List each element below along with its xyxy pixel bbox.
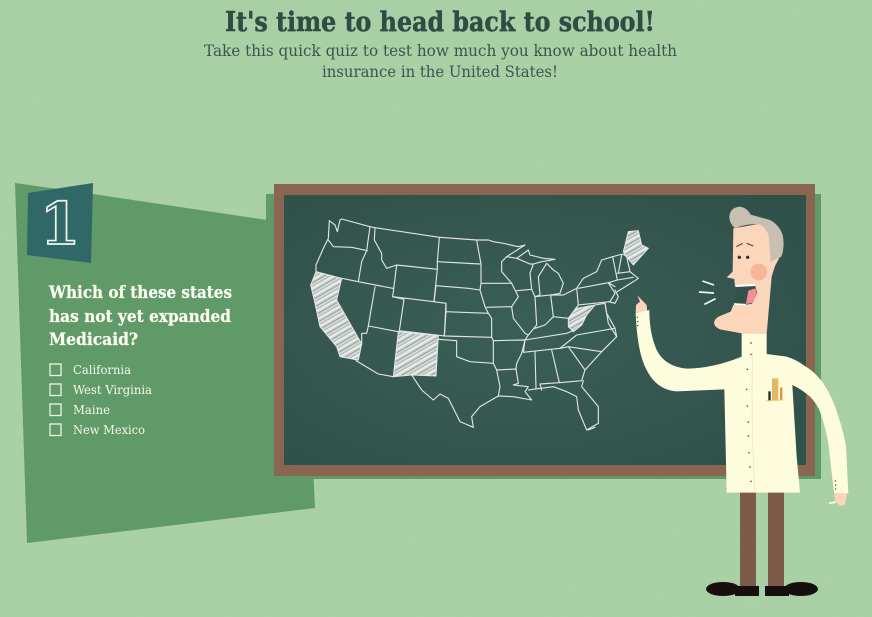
answer options: New Mexico	[73, 423, 145, 437]
answer options	[50, 363, 152, 437]
badge: question number: 1	[40, 190, 80, 258]
raised hand	[636, 295, 647, 313]
panel: question	[15, 183, 315, 543]
coat seam and buttons	[637, 317, 836, 492]
pocket with ruler, pen and pencil	[766, 378, 783, 401]
question text: has not yet expanded	[49, 307, 231, 326]
subtitle	[204, 42, 677, 81]
chalkboard	[266, 184, 821, 479]
shoes	[706, 582, 818, 596]
title: It's time to head back to school!	[225, 7, 655, 38]
state borders	[316, 219, 638, 430]
lower hand	[834, 492, 847, 506]
badge: question number	[27, 183, 93, 263]
map of the United States	[311, 219, 648, 430]
cheek	[750, 264, 767, 280]
answer options: Maine	[73, 403, 110, 417]
Maine	[623, 231, 648, 265]
subtitle: insurance in the United States!	[322, 63, 558, 81]
chalk	[829, 502, 836, 503]
speech lines	[699, 281, 716, 304]
subtitle: Take this quick quiz to test how much you know about health	[204, 42, 677, 60]
California	[311, 272, 362, 360]
question text: Medicaid?	[49, 330, 138, 349]
lab coat	[636, 310, 848, 493]
answer options: California	[73, 363, 131, 377]
legs	[740, 490, 784, 587]
head and neck	[714, 223, 780, 334]
answer options: West Virginia	[73, 383, 152, 397]
question text	[48, 283, 232, 349]
West Virginia	[568, 305, 595, 332]
character: teacher	[636, 207, 848, 506]
mouth	[733, 285, 757, 305]
question text: Which of these states	[48, 283, 232, 302]
eyes and brow	[736, 243, 753, 259]
New Mexico	[393, 332, 438, 377]
hair	[729, 207, 784, 262]
